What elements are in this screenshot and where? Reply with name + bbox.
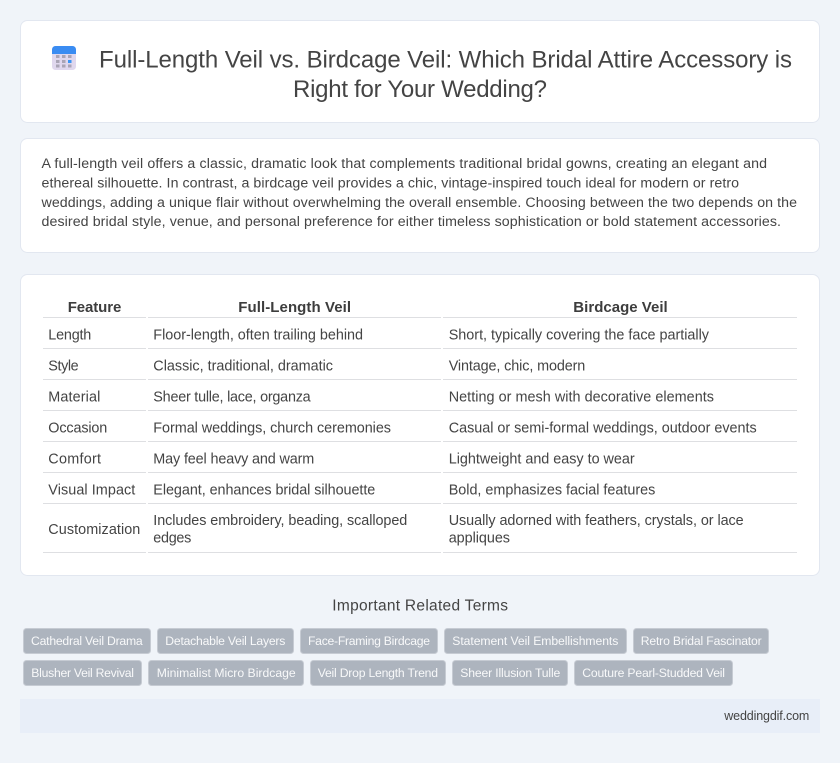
row: customization: Includes embroidery, beading, scalloped [153, 513, 407, 529]
tag: veil drop length trend: Veil Drop Length Trend [318, 666, 438, 680]
row: length [48, 327, 710, 343]
tag: retro bridal fascinator: Retro Bridal Fascinator [641, 634, 762, 648]
tag: blusher veil revival [24, 660, 142, 686]
row: visual impact: Elegant, enhances bridal silhouette [153, 482, 375, 498]
tag: cathedral veil drama [24, 628, 150, 654]
tag: face-framing birdcage: Face-Framing Birdcage [308, 634, 430, 648]
row: occasion [48, 420, 757, 436]
text block: introduction paragraph: desired bridal style, venue, and personal preference for either timeless sophistication or bold statement accessories. [42, 214, 781, 230]
row: length: Short, typically covering the face partially [449, 327, 710, 343]
tags: related terms [24, 628, 768, 686]
tag: statement veil embellishments [444, 628, 626, 654]
tag: cathedral veil drama: Cathedral Veil Drama [31, 634, 143, 648]
row: material: Sheer tulle, lace, organza [153, 389, 311, 405]
row: occasion: Formal weddings, church ceremonies [153, 420, 391, 436]
title [99, 46, 792, 103]
text block: introduction paragraph: A full-length veil offers a classic, dramatic look that complements traditional bridal gowns, creating an elegant and [42, 156, 767, 172]
table header: Full-Length Veil [238, 299, 351, 316]
tag: detachable veil layers [158, 628, 294, 654]
row: visual impact: Bold, emphasizes facial features [449, 482, 655, 498]
row: customization [48, 513, 744, 547]
row: length: Floor-length, often trailing behind [153, 327, 363, 343]
row: customization: edges [153, 531, 191, 547]
tag: statement veil embellishments: Statement Veil Embellishments [452, 634, 618, 648]
tag: retro bridal fascinator [634, 628, 768, 654]
tag: detachable veil layers: Detachable Veil Layers [165, 634, 285, 648]
tag: blusher veil revival: Blusher Veil Revival [31, 666, 134, 680]
footer: weddingdif.com [723, 709, 809, 723]
row: material: Netting or mesh with decorative elements [449, 389, 714, 405]
tag: face-framing birdcage [300, 628, 438, 654]
heading: important related terms: Important Related Terms [332, 598, 508, 615]
tag: minimalist micro birdcage [148, 660, 304, 686]
tag: sheer illusion tulle [452, 660, 568, 686]
table header [68, 299, 668, 316]
tag: couture pearl-studded veil [574, 660, 732, 686]
row: style: Style [48, 358, 79, 374]
table header: Feature [68, 299, 121, 316]
row: occasion: Occasion [48, 420, 107, 436]
tag: couture pearl-studded veil: Couture Pearl-Studded Veil [582, 666, 725, 680]
row: material [48, 389, 714, 405]
tag: minimalist micro birdcage: Minimalist Micro Birdcage [157, 666, 296, 680]
row: customization: Customization [48, 522, 140, 538]
title: Right for Your Wedding? [293, 76, 547, 103]
row: comfort: May feel heavy and warm [153, 451, 314, 467]
text block: introduction paragraph [40, 156, 797, 230]
panel: introduction [20, 138, 820, 252]
row: visual impact [48, 482, 655, 498]
tag: sheer illusion tulle: Sheer Illusion Tulle [460, 666, 561, 680]
row: customization: Usually adorned with feathers, crystals, or lace [449, 513, 744, 529]
footer [20, 699, 820, 733]
title: Full-Length Veil vs. Birdcage Veil: Which Bridal Attire Accessory is [99, 46, 792, 74]
row: comfort: Comfort [48, 451, 101, 467]
row: customization: appliques [449, 531, 510, 547]
row: occasion: Casual or semi-formal weddings, outdoor events [449, 420, 757, 436]
table header: Birdcage Veil [573, 299, 668, 316]
panel: comparison table [20, 274, 820, 576]
row: comfort: Lightweight and easy to wear [449, 451, 635, 467]
row: style: Classic, traditional, dramatic [153, 358, 333, 374]
icon: calendar [52, 46, 76, 70]
text block: introduction paragraph: ethereal silhouette. In contrast, a birdcage veil provides a chic, vintage-inspired touch ideal for modern or retro [42, 176, 739, 192]
text block: introduction paragraph: weddings, adding a unique flair without overwhelming the overall ensemble. Choosing between the two depends on the [40, 195, 797, 211]
row: length: Length [48, 327, 91, 343]
panel: title card [20, 20, 820, 122]
row: comfort [48, 451, 635, 467]
row: visual impact: Visual Impact [48, 482, 135, 498]
tag: veil drop length trend [310, 660, 446, 686]
row: material: Material [48, 389, 100, 405]
row: style: Vintage, chic, modern [449, 358, 585, 374]
row: style [48, 358, 585, 374]
